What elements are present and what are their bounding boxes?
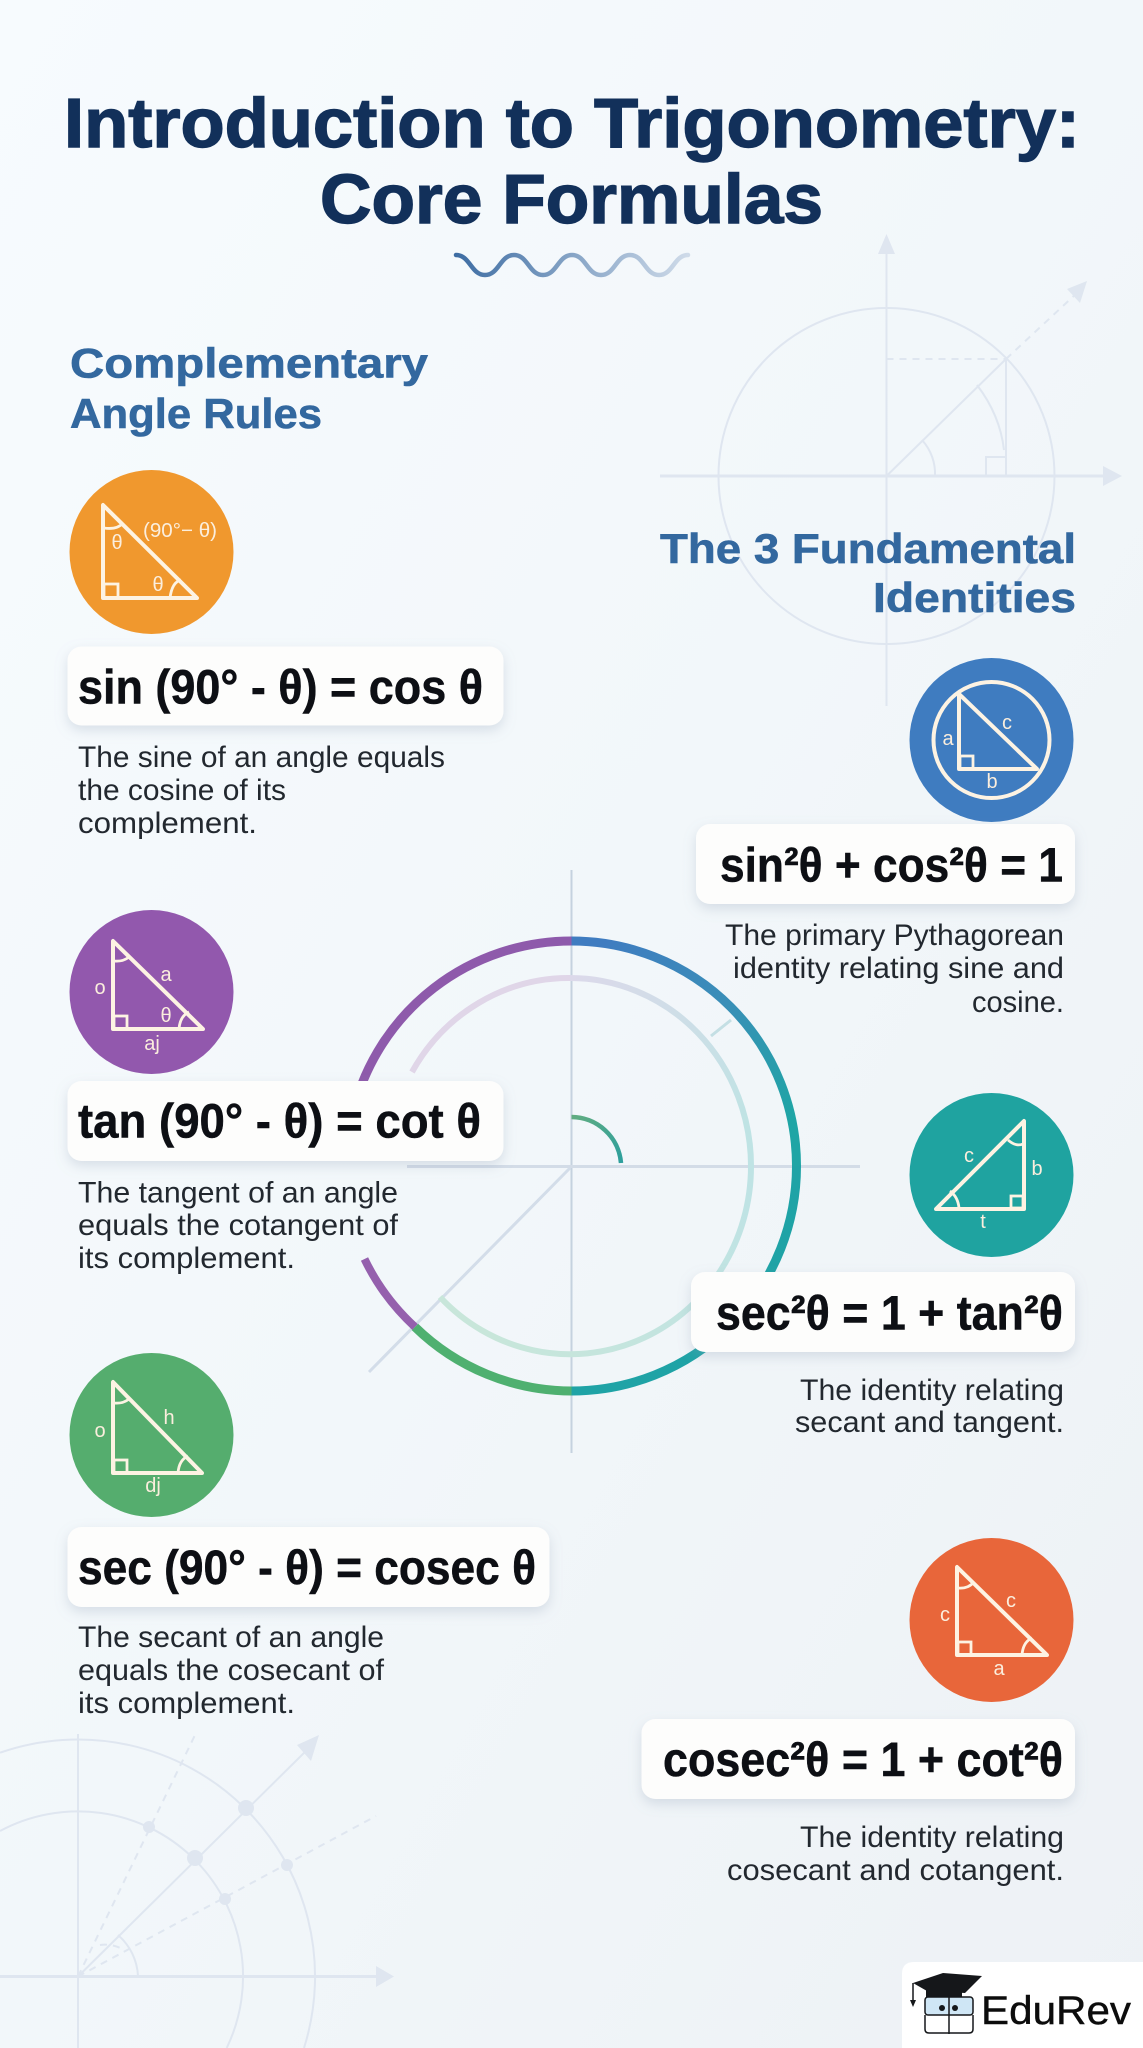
formula: tan complement: tan (90° - θ) = cot θ <box>78 1096 481 1148</box>
icon: blue circle triangle: b <box>986 771 998 793</box>
central ring diagram <box>354 870 860 1453</box>
description: secant: The secant of an angle <box>78 1621 384 1654</box>
icon: purple triangle: o <box>94 977 106 999</box>
formula: sec squared: sec²θ = 1 + tan²θ <box>716 1288 1063 1340</box>
description: secant: its complement. <box>78 1687 295 1720</box>
heading: Complementary Angle Rules: Angle Rules <box>70 390 322 437</box>
description: secant: equals the cosecant of <box>78 1654 385 1687</box>
formula: sec squared <box>691 1272 1075 1352</box>
icon: green triangle: h <box>163 1407 175 1429</box>
icon: red-orange triangle: a <box>993 1658 1005 1680</box>
heading: The 3 Fundamental Identities: Identities <box>873 574 1076 621</box>
icon: blue circle triangle: c <box>1002 712 1012 734</box>
description: cosecant cotangent: cosecant and cotangent. <box>727 1854 1064 1887</box>
title <box>64 84 1080 238</box>
icon: teal triangle: b <box>1031 1158 1043 1180</box>
panel: Pythagorean identity <box>696 658 1075 1019</box>
icon: green triangle <box>70 1353 234 1517</box>
heading: Complementary Angle Rules <box>70 340 429 437</box>
icon: blue circle triangle <box>910 658 1074 822</box>
heading: The 3 Fundamental Identities: The 3 Fundamental <box>660 525 1076 572</box>
description: sine: complement. <box>78 807 257 840</box>
icon: purple triangle: a <box>160 964 172 986</box>
background diagram: unit circle top right <box>660 234 1122 706</box>
formula: sin complement: sin (90° - θ) = cos θ <box>78 662 483 714</box>
description: Pythagorean <box>725 919 1064 1019</box>
description: Pythagorean: The primary Pythagorean <box>725 919 1064 952</box>
logo: EduRev: EduRev <box>981 1989 1131 2033</box>
icon: red-orange triangle: c <box>940 1604 950 1626</box>
description: tangent: its complement. <box>78 1242 295 1275</box>
description: secant tangent: secant and tangent. <box>795 1406 1064 1439</box>
panel: cosecant cotangent identity <box>642 1538 1075 1887</box>
description: sine: The sine of an angle equals <box>78 741 445 774</box>
description: sine <box>78 741 445 840</box>
description: cosecant cotangent: The identity relating <box>800 1821 1064 1854</box>
icon: red-orange triangle: c <box>1006 1590 1016 1612</box>
description: tangent: equals the cotangent of <box>78 1209 399 1242</box>
icon: blue circle triangle: a <box>942 728 954 750</box>
formula: cosec squared <box>642 1719 1075 1799</box>
panel: sine complementary rule <box>68 470 504 840</box>
icon: green triangle: dj <box>145 1475 161 1497</box>
logo: EduRev <box>902 1962 1143 2048</box>
description: secant tangent: The identity relating <box>800 1374 1064 1407</box>
icon: purple triangle <box>70 910 234 1074</box>
icon: graduation cap mascot <box>910 1973 982 2034</box>
formula: sin squared plus cos squared <box>696 824 1075 904</box>
icon: purple triangle: aj <box>144 1033 160 1055</box>
heading: Complementary Angle Rules: Complementary <box>70 340 429 386</box>
description: Pythagorean: identity relating sine and <box>733 952 1064 985</box>
icon: orange triangle <box>70 470 234 634</box>
description: secant tangent <box>795 1374 1064 1439</box>
icon: teal triangle: c <box>964 1145 974 1167</box>
description: tangent <box>78 1176 399 1275</box>
icon: orange triangle: θ <box>152 574 164 596</box>
formula: cosec squared: cosec²θ = 1 + cot²θ <box>663 1734 1063 1787</box>
icon: purple triangle: θ <box>160 1005 172 1027</box>
description: cosecant cotangent <box>727 1821 1064 1887</box>
formula: sin complement <box>68 646 504 726</box>
title: Core Formulas <box>320 160 823 238</box>
background diagram: polar grid bottom left <box>0 1733 394 2048</box>
icon: orange triangle: (90°− θ) <box>143 520 217 542</box>
formula: sec complement <box>68 1527 550 1607</box>
icon: teal triangle: t <box>980 1211 986 1233</box>
icon: teal triangle <box>910 1093 1074 1257</box>
description: secant <box>78 1621 385 1720</box>
icon: orange triangle: θ <box>111 532 123 554</box>
description: tangent: The tangent of an angle <box>78 1176 398 1210</box>
formula: sec complement: sec (90° - θ) = cosec θ <box>78 1542 536 1595</box>
description: sine: the cosine of its <box>78 774 286 807</box>
icon: red-orange triangle <box>910 1538 1074 1702</box>
description: Pythagorean: cosine. <box>972 986 1064 1019</box>
formula: tan complement <box>68 1081 504 1161</box>
decorative wave under title <box>456 255 688 275</box>
formula: sin squared plus cos squared: sin²θ + cos²θ = 1 <box>720 840 1063 892</box>
panel: secant complementary rule <box>68 1353 550 1720</box>
panel: secant tangent identity <box>691 1093 1075 1439</box>
heading: The 3 Fundamental Identities <box>660 525 1076 621</box>
icon: green triangle: o <box>94 1420 106 1442</box>
title: Introduction to Trigonometry: <box>64 84 1080 162</box>
panel: tangent complementary rule <box>68 910 504 1275</box>
